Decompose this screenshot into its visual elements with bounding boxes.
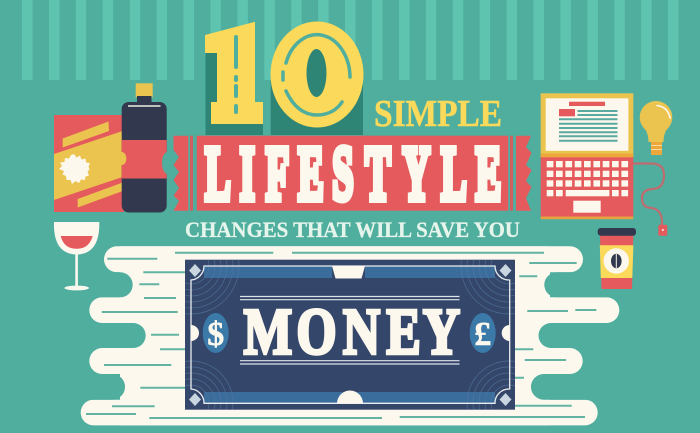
starburst [59, 154, 90, 184]
power cord and plug [633, 164, 667, 236]
coffee cup [598, 228, 636, 289]
rules above and below word [240, 296, 460, 364]
box of food [54, 115, 124, 212]
bottle [117, 83, 173, 212]
guilloche bands [185, 260, 515, 410]
keyboard [547, 161, 628, 213]
laptop [541, 93, 633, 219]
digit 1 road dashes [234, 37, 238, 112]
number shadow [206, 53, 363, 135]
wine glass [54, 222, 99, 290]
speed lines [86, 253, 596, 418]
inner border [191, 266, 510, 403]
word LIFESTYLE: LIFESTYLE [205, 131, 501, 215]
digit 0 inline ring [283, 35, 350, 115]
dollar medallion [203, 313, 229, 353]
corner diamonds [189, 264, 512, 406]
pound medallion [470, 313, 496, 353]
big number 10 [205, 22, 364, 135]
dollar medallion: $ [207, 316, 224, 353]
lightbulb [640, 101, 672, 155]
word SIMPLE: SIMPLE [374, 93, 502, 135]
bottle label [122, 140, 167, 178]
notches [191, 266, 510, 404]
digit 1 [205, 22, 263, 124]
subtitle: CHANGES THAT WILL SAVE YOU [185, 217, 520, 242]
digit 0 counter [306, 49, 326, 97]
pound medallion: £ [474, 316, 491, 353]
digit 0 [270, 22, 364, 128]
screen content [559, 102, 618, 141]
banner [174, 136, 532, 211]
speed cloud behind banknote [60, 246, 640, 425]
word MONEY: MONEY [244, 294, 460, 368]
laptop base [541, 157, 633, 216]
banknote [185, 260, 515, 410]
